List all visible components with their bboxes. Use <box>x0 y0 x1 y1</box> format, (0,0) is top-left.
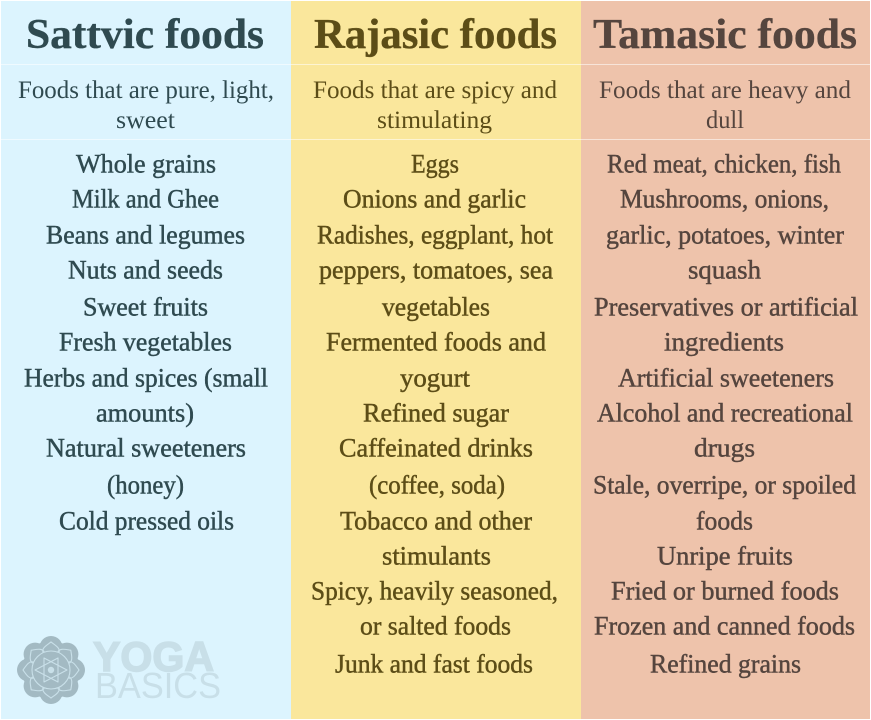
list: rajasic foods <box>311 150 558 678</box>
list: rajasic foods: Tobacco and other <box>340 506 532 536</box>
list: tamasic foods: Artificial sweeteners <box>618 364 834 392</box>
list: rajasic foods: Radishes, eggplant, hot <box>317 220 554 250</box>
list: tamasic foods: garlic, potatoes, winter <box>606 220 844 250</box>
list: tamasic foods: Mushrooms, onions, <box>620 184 829 214</box>
list: rajasic foods: peppers, tomatoes, sea <box>319 256 553 284</box>
description: rajasic <box>313 77 557 134</box>
list: rajasic foods: Fermented foods and <box>326 328 546 356</box>
panel: rajasic foods <box>291 1 581 719</box>
description: rajasic: Foods that are spicy and <box>313 77 557 104</box>
list: tamasic foods: drugs <box>694 434 755 462</box>
list: sattvic foods: Milk and Ghee <box>72 184 219 214</box>
panel: sattvic foods <box>1 1 291 719</box>
description: rajasic: stimulating <box>377 107 493 134</box>
description: tamasic: Foods that are heavy and <box>599 77 851 104</box>
list: sattvic foods: Herbs and spices (small <box>24 364 268 392</box>
description: tamasic: dull <box>706 107 744 134</box>
icon: mandala <box>17 636 85 704</box>
list: rajasic foods: Caffeinated drinks <box>339 434 533 462</box>
list: rajasic foods: yogurt <box>400 364 471 392</box>
heading: sattvic foods: Sattvic foods <box>26 12 264 58</box>
panel: tamasic foods <box>581 1 870 719</box>
list: sattvic foods: Natural sweeteners <box>46 434 246 462</box>
list: tamasic foods: squash <box>688 256 761 284</box>
list: tamasic foods: Fried or burned foods <box>611 576 839 606</box>
description: tamasic <box>599 77 851 134</box>
list: rajasic foods: Spicy, heavily seasoned, <box>311 576 558 606</box>
list: sattvic foods: Cold pressed oils <box>59 506 234 536</box>
list: tamasic foods: Unripe fruits <box>657 542 793 570</box>
list: sattvic foods: Beans and legumes <box>46 220 245 250</box>
list: rajasic foods: Eggs <box>411 150 459 178</box>
wordmark: yoga: YOGA <box>93 633 214 680</box>
list: tamasic foods: Preservatives or artificial <box>594 292 858 322</box>
description: sattvic: Foods that are pure, light, <box>18 77 274 104</box>
description: sattvic <box>18 77 274 134</box>
list: tamasic foods: Refined grains <box>650 650 801 678</box>
list: sattvic foods: Fresh vegetables <box>59 328 232 356</box>
list: tamasic foods: foods <box>696 506 753 536</box>
list: sattvic foods: Whole grains <box>76 150 216 178</box>
list: rajasic foods: (coffee, soda) <box>369 470 505 500</box>
list: tamasic foods: ingredients <box>664 328 784 356</box>
list: tamasic foods: Stale, overripe, or spoiled <box>593 470 856 500</box>
logo: yoga basics <box>17 633 221 706</box>
list: sattvic foods: amounts) <box>96 398 194 428</box>
list: rajasic foods: vegetables <box>382 292 490 322</box>
list: rajasic foods: or salted foods <box>360 612 511 640</box>
list: tamasic foods: Red meat, chicken, fish <box>607 150 841 178</box>
heading: rajasic foods: Rajasic foods <box>314 12 557 58</box>
list: tamasic foods <box>593 150 858 678</box>
list: rajasic foods: stimulants <box>382 542 491 570</box>
list: sattvic foods: Nuts and seeds <box>68 256 223 284</box>
heading: tamasic foods: Tamasic foods <box>593 12 857 58</box>
list: sattvic foods: (honey) <box>107 470 184 500</box>
list: sattvic foods <box>24 150 268 536</box>
wordmark: basics: BASICS <box>95 665 221 706</box>
list: tamasic foods: Alcohol and recreational <box>597 398 853 428</box>
list: sattvic foods: Sweet fruits <box>83 292 208 322</box>
list: rajasic foods: Refined sugar <box>363 398 509 428</box>
list: tamasic foods: Frozen and canned foods <box>594 612 855 640</box>
description: sattvic: sweet <box>116 107 175 134</box>
list: rajasic foods: Junk and fast foods <box>335 650 533 678</box>
list: rajasic foods: Onions and garlic <box>343 184 526 214</box>
